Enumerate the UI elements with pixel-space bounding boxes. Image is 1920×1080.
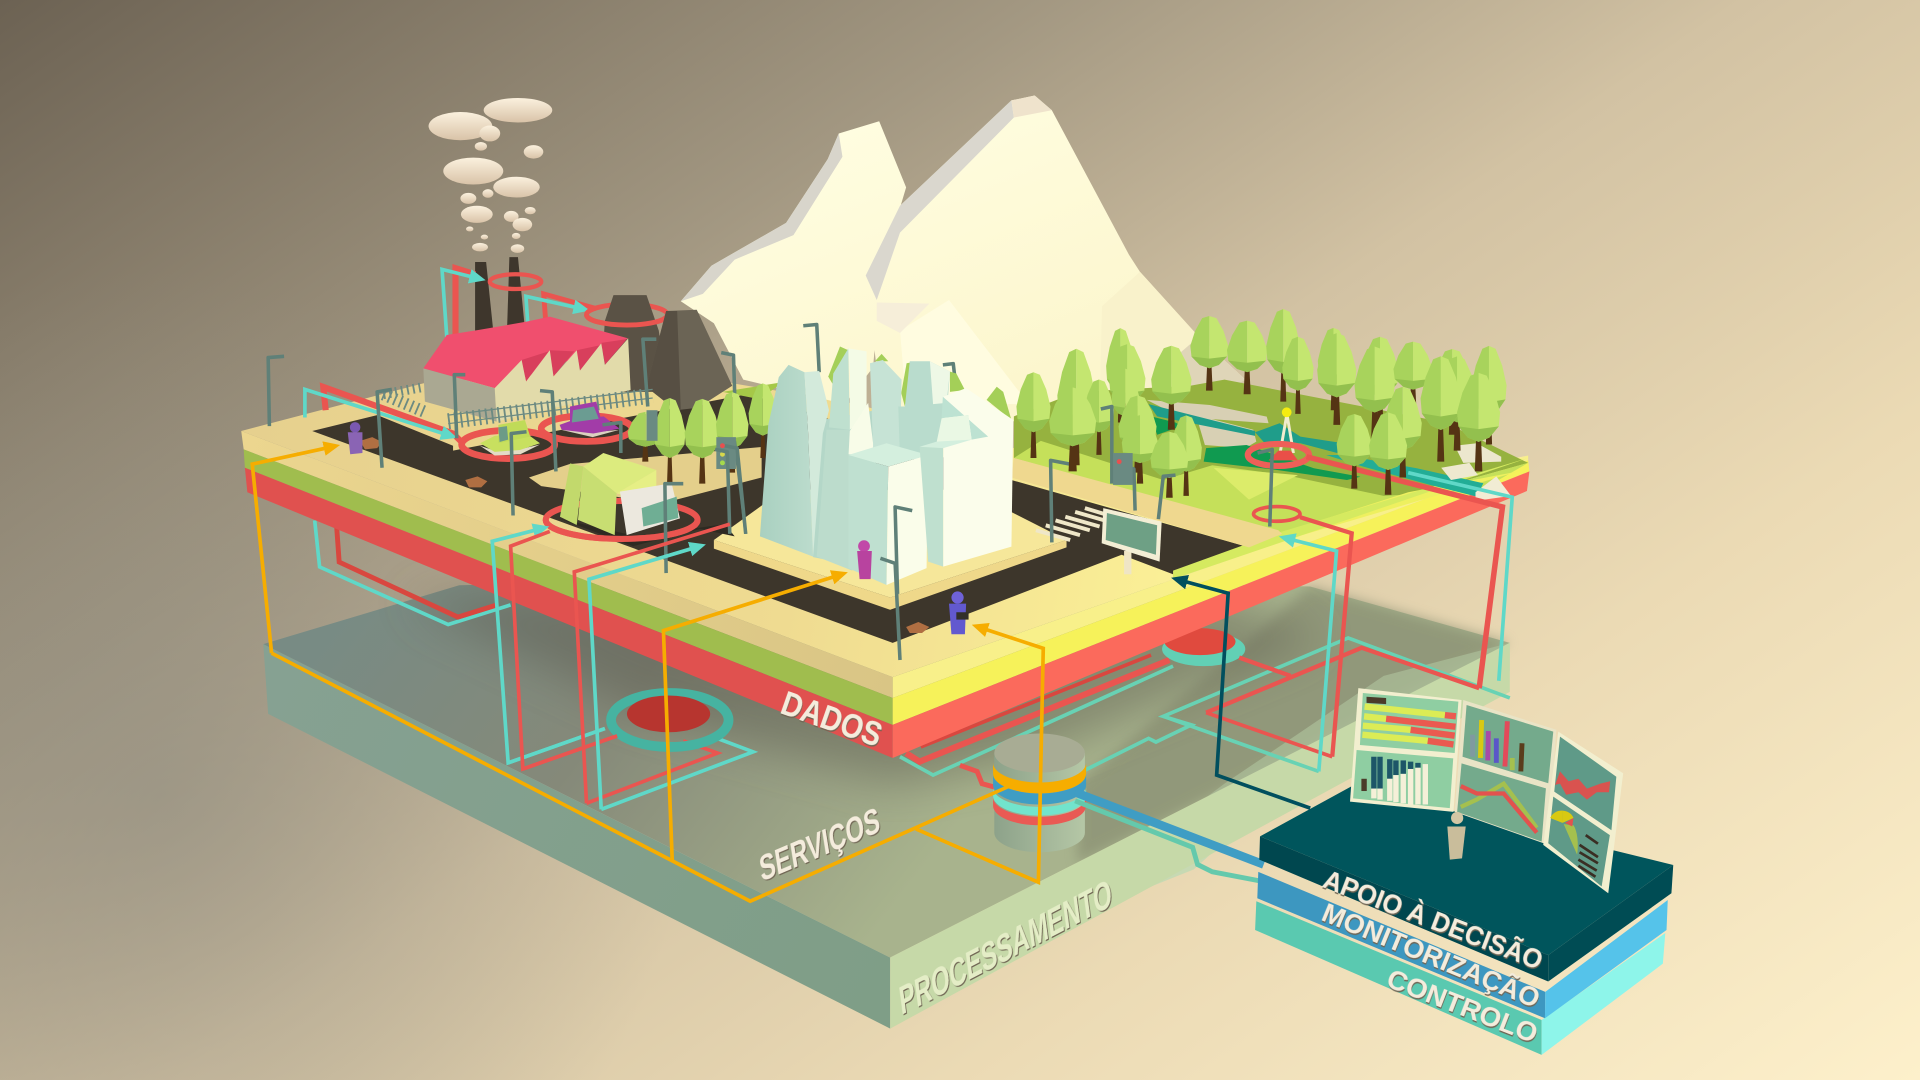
processing cylinder xyxy=(993,733,1086,852)
park front trees and lamp xyxy=(1258,412,1407,527)
panel: stacked decision slabs xyxy=(1255,786,1673,1055)
screen 1 bottom panel xyxy=(1353,750,1453,808)
blue slab xyxy=(1257,872,1545,1018)
back tower right xyxy=(898,361,950,459)
truck ring back xyxy=(546,501,698,539)
middle box left face xyxy=(848,455,888,585)
middle box right face xyxy=(887,455,928,585)
label: APOIO A DECISAO: APOIO À DECISÃO xyxy=(1319,863,1547,976)
screen frame 2 xyxy=(1455,700,1556,845)
mountains xyxy=(681,96,1245,422)
factory xyxy=(423,317,631,422)
park trees xyxy=(1016,309,1507,498)
cooling towers with ring xyxy=(587,295,732,410)
tree block sidewalk xyxy=(529,447,762,503)
left pipes to car rings xyxy=(305,387,463,443)
bright lime edge xyxy=(1173,458,1528,579)
sensor mast with ring xyxy=(1248,407,1309,466)
left mountain grey facet xyxy=(681,133,842,301)
road patches xyxy=(360,437,382,449)
front street lamps xyxy=(665,446,1070,660)
screen 2 top panel xyxy=(1463,705,1553,783)
gap filler between towers xyxy=(808,410,876,569)
slab left face xyxy=(263,644,890,1029)
truck ring front xyxy=(546,520,698,539)
service ring right and pipes xyxy=(900,628,1510,787)
teal slab xyxy=(1255,901,1542,1055)
middle box top xyxy=(848,443,928,467)
right box front xyxy=(943,388,1013,567)
billboard xyxy=(1102,508,1162,574)
pipes to towers xyxy=(526,294,596,327)
left mountain xyxy=(681,121,906,404)
screen 1 top panel xyxy=(1360,693,1458,753)
slab right lit band xyxy=(1102,643,1510,906)
right mountain peak xyxy=(1011,96,1052,118)
tree group: street xyxy=(628,383,777,484)
lime front lawn xyxy=(1014,441,1528,533)
label: SERVICOS: SERVIÇOS xyxy=(757,800,882,890)
cargo top xyxy=(583,453,656,493)
smoke clouds xyxy=(429,98,552,253)
right mountain grey facet xyxy=(866,100,1014,300)
label: DADOS: DADOS xyxy=(776,684,887,755)
bright facet xyxy=(1213,468,1298,500)
saw tooth shade xyxy=(522,351,549,382)
label: CONTROLO: CONTROLO xyxy=(1383,963,1542,1049)
stones xyxy=(1147,400,1269,423)
tower B upper lit xyxy=(848,348,867,430)
cap block xyxy=(937,415,972,447)
slab right face xyxy=(890,643,1510,1029)
dark slab top xyxy=(1260,786,1673,955)
crosswalk xyxy=(1036,508,1109,540)
cab window xyxy=(642,497,678,527)
factory fence xyxy=(383,387,653,424)
bar chart xyxy=(1473,720,1522,771)
city buildings xyxy=(760,347,1013,585)
panel: processing slab xyxy=(263,576,1510,1029)
tower A lit strip xyxy=(804,371,829,557)
roof xyxy=(423,317,628,388)
legend lines xyxy=(1578,835,1598,877)
pipes: cylinder to dashboard xyxy=(1075,792,1264,882)
park grass xyxy=(722,380,1528,579)
screen 3 top panel xyxy=(1554,737,1616,830)
tracks xyxy=(561,519,735,546)
gable wall xyxy=(423,368,497,422)
vertical pipes right xyxy=(1185,473,1512,808)
person: blue xyxy=(949,591,969,634)
band teal xyxy=(993,787,1086,816)
car: purple xyxy=(560,402,620,437)
cargo front xyxy=(617,470,656,495)
pipes to chimneys with ring xyxy=(442,268,541,339)
dark slab side right xyxy=(1548,865,1673,982)
city block sidewalk xyxy=(714,540,1067,610)
right mountain xyxy=(866,96,1245,422)
mid lit band xyxy=(890,643,1510,958)
pipes on slab: back left xyxy=(315,520,511,624)
band red xyxy=(993,797,1086,825)
vertical pipes left xyxy=(492,524,730,809)
spire xyxy=(849,403,873,454)
lower ridge xyxy=(900,300,1029,404)
screen 3 bottom panel xyxy=(1548,797,1610,887)
right shaded band xyxy=(1078,587,1510,863)
tower B lower xyxy=(817,430,852,571)
label: MONITORIZACAO: MONITORIZAÇÃO xyxy=(1318,896,1545,1014)
mid street lamps xyxy=(511,391,621,516)
trees behind city xyxy=(828,347,848,385)
car: lime xyxy=(480,420,540,456)
panel: data platform DADOS xyxy=(241,367,1529,758)
person: purple xyxy=(348,422,362,454)
screen 2 bottom panel xyxy=(1457,763,1546,842)
person: pink xyxy=(857,540,872,579)
stacked bars xyxy=(1362,707,1456,744)
rocks xyxy=(1455,443,1501,463)
long wall xyxy=(495,338,631,422)
person: analyst xyxy=(1447,812,1466,860)
sidewalk strip xyxy=(1011,458,1282,547)
dashboard screens xyxy=(1350,688,1623,893)
tower A left face xyxy=(760,365,813,557)
screen frame 1 xyxy=(1350,688,1462,812)
truck xyxy=(546,453,735,546)
traffic lights: street xyxy=(647,410,746,534)
green pond xyxy=(1204,445,1360,480)
right faces xyxy=(893,456,1528,698)
left faces xyxy=(241,431,893,698)
label: PROCESSAMENTO: PROCESSAMENTO xyxy=(897,871,1114,1024)
cargo left xyxy=(560,463,583,525)
right box ledge xyxy=(920,440,972,448)
platform top xyxy=(241,367,1528,677)
dark label xyxy=(1367,697,1386,704)
service ring left xyxy=(508,693,753,809)
red pipes across park with ring xyxy=(1254,457,1502,757)
cargo side xyxy=(578,467,617,535)
pie chart xyxy=(1550,811,1578,855)
green behind city xyxy=(722,382,784,399)
yellow edge xyxy=(1278,471,1518,536)
tower B upper left xyxy=(829,348,850,430)
back tower centre xyxy=(870,360,902,448)
cab xyxy=(620,483,680,535)
column chart xyxy=(1364,757,1425,804)
screen frame 3 xyxy=(1543,732,1623,893)
band orange xyxy=(993,763,1086,793)
band blue xyxy=(993,774,1086,804)
orange service pipes xyxy=(252,448,1043,901)
park lamps and traffic light xyxy=(1101,407,1176,519)
right box slant xyxy=(942,397,988,440)
right box left face xyxy=(920,447,943,567)
zigzag chart xyxy=(1555,771,1610,800)
back street lamps xyxy=(268,324,956,468)
river xyxy=(1149,404,1255,436)
line chart xyxy=(1461,784,1537,833)
factory chimneys xyxy=(475,257,525,333)
dark slab side left xyxy=(1259,836,1548,982)
road xyxy=(312,394,1249,643)
car rings xyxy=(462,416,632,459)
platform shadow on slab xyxy=(404,594,1322,784)
